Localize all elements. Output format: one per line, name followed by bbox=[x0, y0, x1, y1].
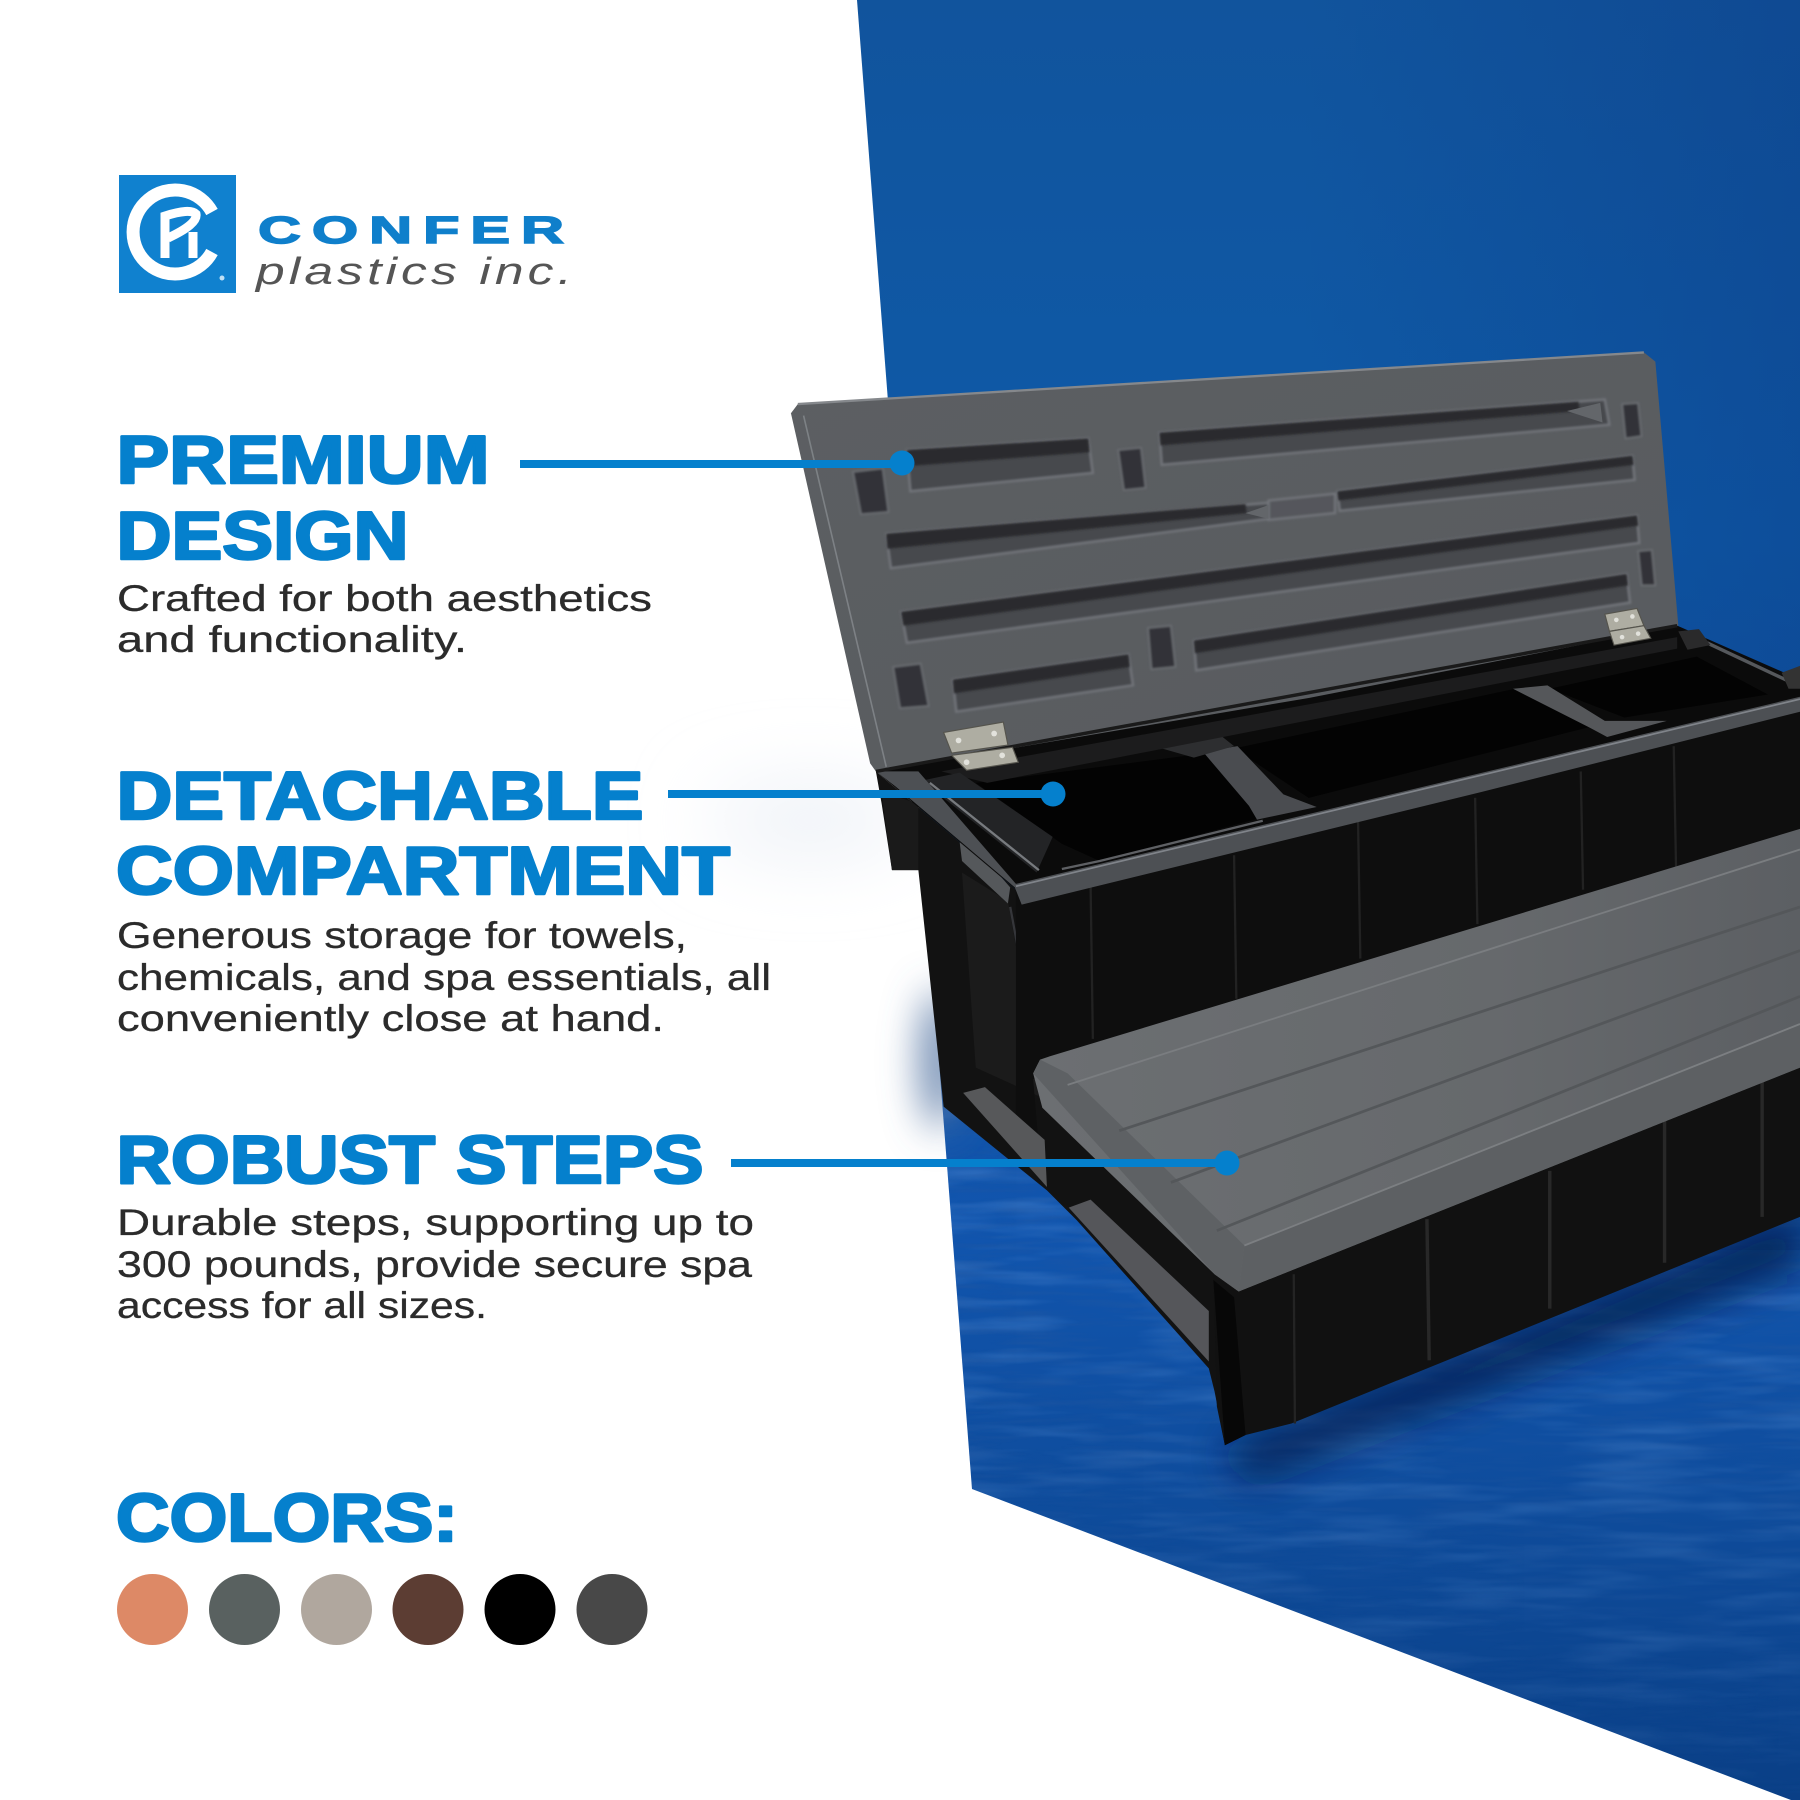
text: steps description: access for all sizes. bbox=[117, 1285, 487, 1326]
logo wordmark: CONFER bbox=[258, 210, 575, 252]
text: steps description: Durable steps, supporting up to bbox=[117, 1202, 754, 1243]
storage cavity with three bins bbox=[876, 626, 1800, 890]
logo subline: plastics inc. bbox=[255, 251, 576, 293]
text: compartment description bbox=[117, 915, 771, 1039]
box left side bbox=[876, 771, 1225, 1445]
text: compartment description: Generous storage for towels, bbox=[117, 915, 687, 956]
text: compartment description: conveniently close at hand. bbox=[117, 998, 664, 1039]
blue background panel bbox=[850, 0, 1800, 1800]
lid small slots bbox=[853, 403, 1655, 708]
heading: premium design: PREMIUM bbox=[116, 422, 490, 498]
heading: detachable compartment: COMPARTMENT bbox=[116, 833, 730, 909]
grey side strips bbox=[963, 1087, 1209, 1361]
logo: Confer Plastics bbox=[119, 175, 576, 293]
heading: detachable compartment: DETACHABLE bbox=[116, 758, 644, 834]
text: premium design description: Crafted for both aesthetics bbox=[117, 578, 652, 619]
lid rib end triangles bbox=[1246, 403, 1603, 519]
hinges bbox=[944, 608, 1651, 770]
callout: robust steps bbox=[731, 1150, 1240, 1176]
lid rib shadows bbox=[886, 402, 1638, 693]
text: premium design description bbox=[117, 578, 652, 660]
text: premium design description: and functionality. bbox=[117, 619, 467, 660]
product: spa step with storage bbox=[791, 352, 1800, 1445]
text: steps description: 300 pounds, provide secure spa bbox=[117, 1244, 752, 1285]
open lid bbox=[791, 352, 1678, 771]
logo mark bbox=[119, 175, 236, 293]
box front rim bbox=[876, 697, 1800, 905]
heading: premium design: DESIGN bbox=[116, 498, 408, 574]
heading: detachable compartment bbox=[116, 758, 730, 909]
colour swatches bbox=[117, 1574, 648, 1645]
callout: detachable compartment bbox=[668, 782, 1066, 806]
lower step tread bbox=[1033, 829, 1800, 1291]
text: steps description bbox=[117, 1202, 754, 1326]
lower step riser bbox=[1213, 1050, 1800, 1445]
heading: premium design bbox=[116, 422, 490, 574]
heading: robust steps: ROBUST STEPS bbox=[116, 1122, 704, 1198]
lid ribs bbox=[886, 399, 1639, 712]
heading: colors: COLORS: bbox=[116, 1480, 458, 1556]
box front panel bbox=[1016, 703, 1800, 1148]
soft shadow beside product bbox=[710, 792, 958, 1130]
text: compartment description: chemicals, and spa essentials, all bbox=[117, 957, 771, 998]
callout: premium design bbox=[520, 450, 914, 476]
